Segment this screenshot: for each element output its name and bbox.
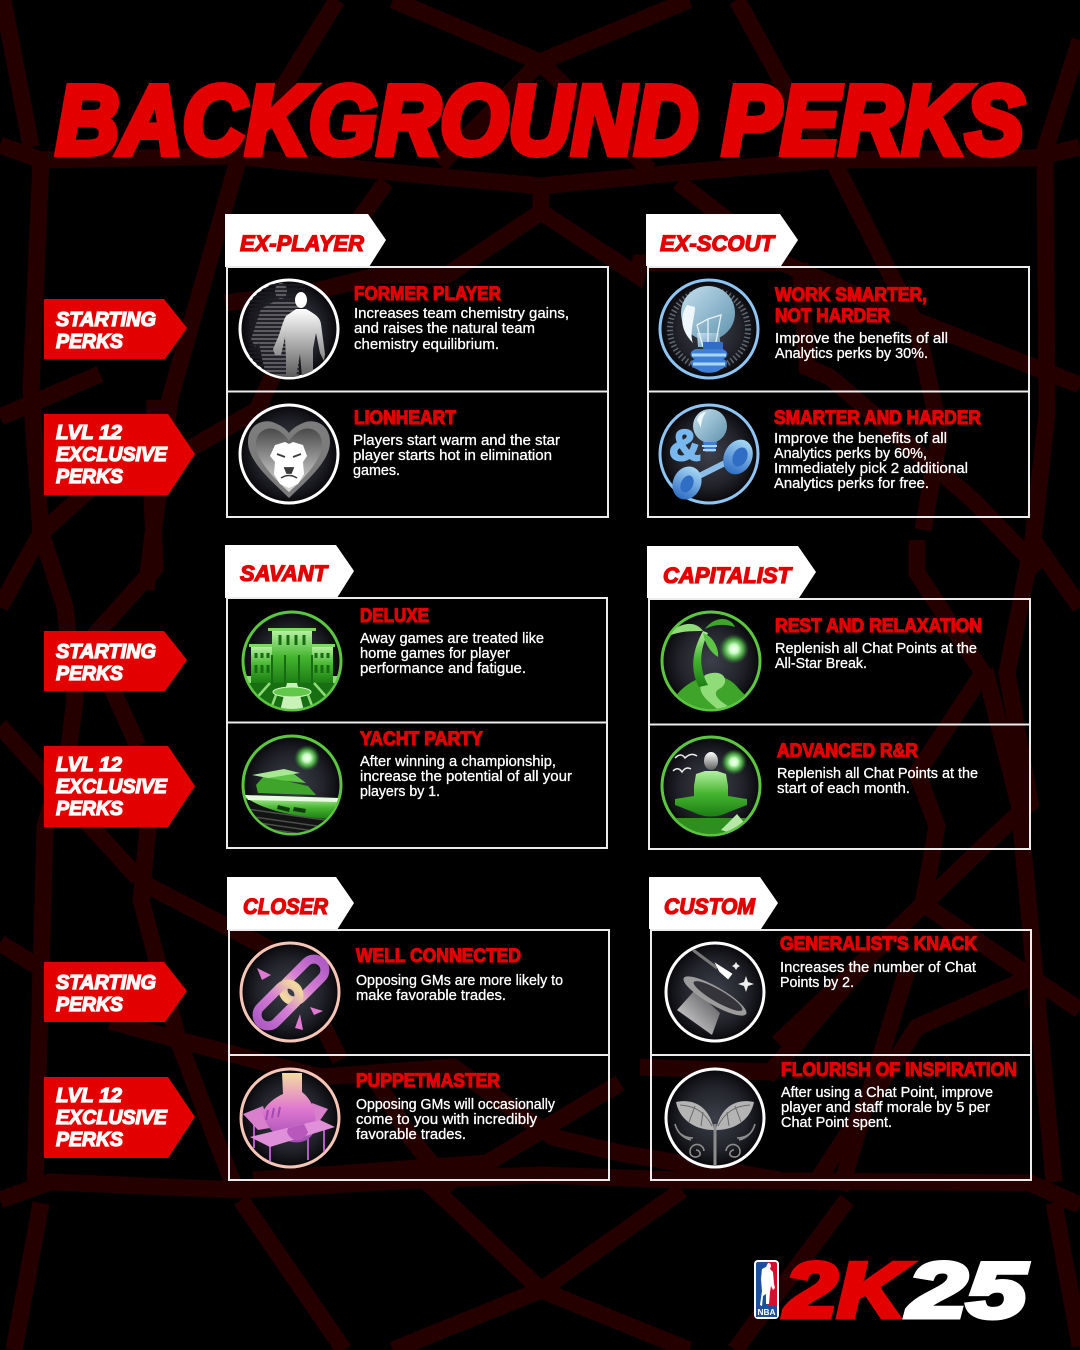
tab: capitalist	[647, 546, 816, 598]
perk text: flourish of inspiration	[781, 1059, 1017, 1131]
perk text: rest and relaxation: Replenish all Chat Points at the	[775, 641, 977, 657]
perk text: flourish of inspiration: player and staff morale by 5 per	[781, 1100, 990, 1116]
perk text: yacht party: players by 1.	[360, 784, 440, 800]
panel: capitalist	[647, 546, 1030, 849]
icon: NBA shield: NBA	[758, 1308, 776, 1317]
perk text: advanced r&r: ADVANCED R&R	[777, 740, 918, 762]
tab: savant	[225, 545, 354, 598]
label: level 12 exclusive perks (row 2)	[44, 746, 195, 827]
wordmark: 2K: 2K	[783, 1246, 912, 1334]
perk text: yacht party: increase the potential of all your	[360, 769, 572, 785]
perk text: well connected: Opposing GMs are more likely to	[356, 973, 563, 989]
panel: savant	[225, 545, 607, 848]
label: level 12 exclusive perks (row 1)	[44, 414, 195, 495]
icon: bulb, ampersand and dumbbell	[660, 405, 758, 504]
panel: closer	[227, 877, 609, 1180]
perk text: generalist's knack	[780, 933, 977, 991]
icon: bulb, ampersand and dumbbell: &	[669, 421, 701, 470]
perk text: puppetmaster	[356, 1070, 556, 1143]
perk text: former player: and raises the natural team	[354, 321, 535, 337]
icon: chain link	[241, 943, 339, 1041]
panel frame	[651, 930, 1031, 1180]
panel frame	[229, 930, 609, 1180]
tab: closer	[227, 877, 354, 930]
perk text: well connected	[356, 945, 563, 1004]
perk text: smarter and harder: Improve the benefits of all	[774, 431, 947, 447]
perk text: lionheart: Players start warm and the star	[353, 433, 560, 449]
perk text: puppetmaster: PUPPETMASTER	[356, 1070, 500, 1092]
perk text: former player: chemistry equilibrium.	[354, 337, 499, 353]
tab: ex-scout	[646, 214, 798, 266]
perk text: well connected: make favorable trades.	[356, 988, 506, 1004]
perk text: flourish of inspiration: Chat Point spent.	[781, 1115, 892, 1131]
label: level 12 exclusive perks (row 3): LVL 12	[56, 1084, 123, 1107]
perk text: advanced r&r: start of each month.	[777, 781, 910, 797]
panel frame	[227, 267, 608, 517]
perk text: lionheart: player starts hot in elimination	[353, 448, 552, 464]
perk text: work smarter, not harder: Improve the benefits of all	[775, 331, 948, 347]
label: starting perks (row 1): STARTING	[56, 308, 156, 331]
panel frame	[649, 599, 1030, 849]
icon: flourishing leaves	[666, 1069, 764, 1167]
perk text: rest and relaxation: All-Star Break.	[775, 656, 867, 672]
perk text: deluxe: Away games are treated like	[360, 631, 544, 647]
label: level 12 exclusive perks (row 1): EXCLUSIVE	[56, 443, 168, 466]
tab: capitalist: CAPITALIST	[663, 563, 793, 588]
label: starting perks (row 1)	[44, 299, 187, 359]
label: starting perks (row 3)	[44, 962, 187, 1022]
perk text: generalist's knack: Points by 2.	[780, 975, 854, 991]
icon: lionheart	[240, 405, 338, 503]
label: level 12 exclusive perks (row 2): EXCLUSIVE	[56, 775, 168, 798]
perk text: rest and relaxation: REST AND RELAXATION	[775, 615, 982, 637]
label: level 12 exclusive perks (row 3): EXCLUSIVE	[56, 1106, 168, 1129]
tab: ex-player	[225, 214, 386, 267]
panel frame	[648, 267, 1029, 517]
perk text: work smarter, not harder: WORK SMARTER,	[775, 284, 927, 306]
perk text: lionheart	[353, 407, 560, 479]
icon: magic hat	[666, 943, 764, 1041]
tab: custom	[649, 877, 778, 929]
tab: savant: SAVANT	[240, 561, 329, 586]
perk text: deluxe: home games for player	[360, 646, 510, 662]
perk text: puppetmaster: come to you with incredibly	[356, 1112, 538, 1128]
icon: palm island	[662, 612, 761, 711]
perk text: puppetmaster: favorable trades.	[356, 1127, 466, 1143]
perk text: advanced r&r	[777, 740, 978, 797]
label: level 12 exclusive perks (row 2): LVL 12	[56, 753, 123, 776]
perk text: former player	[354, 283, 569, 353]
label: level 12 exclusive perks (row 1): LVL 12	[56, 421, 123, 444]
label: level 12 exclusive perks (row 3)	[44, 1077, 195, 1158]
perk text: work smarter, not harder: Analytics perks by 30%.	[775, 346, 928, 362]
perk text: yacht party: After winning a championship,	[360, 754, 556, 770]
panel: ex-scout	[646, 214, 1029, 517]
label: starting perks (row 3): STARTING	[56, 971, 156, 994]
perk text: lionheart: LIONHEART	[354, 407, 456, 429]
tab: ex-scout: EX-SCOUT	[660, 231, 776, 256]
icon: yacht	[242, 736, 342, 835]
panel: ex-player	[225, 214, 608, 517]
icon: puppet master hand	[241, 1069, 339, 1167]
label: level 12 exclusive perks (row 3): PERKS	[56, 1128, 123, 1151]
panel frame	[227, 598, 607, 848]
perk text: generalist's knack: Increases the number of Chat	[780, 960, 976, 976]
icon: meditation	[661, 737, 761, 836]
perk text: yacht party	[360, 728, 572, 800]
perk text: deluxe: performance and fatigue.	[360, 661, 526, 677]
label: starting perks (row 2): STARTING	[56, 640, 156, 663]
perk text: smarter and harder: Analytics perks for free.	[774, 476, 929, 492]
icon: deluxe mansion	[242, 612, 342, 711]
perk text: deluxe	[360, 605, 544, 677]
perk text: puppetmaster: Opposing GMs will occasionally	[356, 1097, 556, 1113]
icon: NBA shield	[754, 1260, 779, 1319]
perk text: advanced r&r: Replenish all Chat Points at the	[777, 766, 978, 782]
perk text: smarter and harder	[774, 407, 981, 492]
logo: NBA 2K25	[754, 1246, 1028, 1334]
perk text: lionheart: games.	[353, 463, 400, 479]
perk text: yacht party: YACHT PARTY	[360, 728, 483, 750]
tab: ex-player: EX-PLAYER	[240, 231, 365, 256]
panel: custom	[649, 877, 1031, 1180]
label: starting perks (row 2)	[44, 631, 187, 691]
wordmark: 25: 25	[905, 1246, 1028, 1334]
tab: custom: CUSTOM	[664, 894, 756, 919]
label: starting perks (row 1): PERKS	[56, 330, 123, 353]
icon: light bulb	[660, 280, 758, 378]
perk text: smarter and harder: SMARTER AND HARDER	[774, 407, 981, 429]
perk text: former player: Increases team chemistry gains,	[354, 306, 569, 322]
perk text: smarter and harder: Analytics perks by 60%,	[774, 446, 927, 462]
perk text: flourish of inspiration: FLOURISH OF INSPIRATION	[781, 1059, 1017, 1081]
label: starting perks (row 2): PERKS	[56, 662, 123, 685]
perk text: smarter and harder: Immediately pick 2 additional	[774, 461, 968, 477]
perk text: work smarter, not harder: NOT HARDER	[775, 305, 890, 327]
perk text: rest and relaxation	[775, 615, 982, 672]
icon: former player	[240, 280, 338, 378]
label: level 12 exclusive perks (row 2): PERKS	[56, 797, 123, 820]
perk text: former player: FORMER PLAYER	[354, 283, 501, 305]
label: level 12 exclusive perks (row 1): PERKS	[56, 465, 123, 488]
perk text: deluxe: DELUXE	[360, 605, 429, 627]
perk text: flourish of inspiration: After using a Chat Point, improve	[781, 1085, 993, 1101]
perk text: work smarter, not harder	[775, 284, 948, 362]
label: starting perks (row 3): PERKS	[56, 993, 123, 1016]
perk text: well connected: WELL CONNECTED	[356, 945, 521, 967]
tab: closer: CLOSER	[243, 894, 329, 919]
perk text: generalist's knack: GENERALIST'S KNACK	[780, 933, 977, 955]
